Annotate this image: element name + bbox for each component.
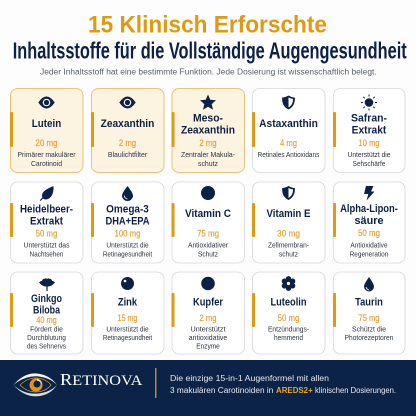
card: Alpha-Liponsäure: Regeneration xyxy=(350,250,388,258)
icon: flower xyxy=(282,276,295,291)
icon: shield xyxy=(282,96,295,110)
card: Vitamin C: 75 mg xyxy=(197,229,219,239)
card: Alpha-Liponsäure: 50 mg xyxy=(358,228,380,238)
card: Omega-3 DHA+EPA: Omega-3 xyxy=(106,204,149,216)
card: Vitamin E: Zellmembran- xyxy=(268,240,310,250)
card: Heidelbeer-Extrakt: Heidelbeer- xyxy=(20,204,73,216)
icon: drop xyxy=(364,277,374,292)
card: Meso-Zeaxanthin: 2 mg xyxy=(199,138,217,148)
card: Luteolin: Luteolin xyxy=(270,297,307,309)
card: Astaxanthin: Retinales Antioxidans xyxy=(258,150,320,159)
logo: wordmark: RETINOVA xyxy=(60,370,142,389)
card: Vitamin C: Schutz xyxy=(198,250,218,258)
card: Safran-Extrakt: Safran- xyxy=(351,113,387,125)
icon: shield xyxy=(282,186,295,200)
logo: eye xyxy=(14,373,57,396)
icon: eye xyxy=(38,96,55,108)
card: Vitamin E: schutz xyxy=(279,250,298,258)
card: Taurin: Taurin xyxy=(355,297,383,309)
card: Omega-3 DHA+EPA: 100 mg xyxy=(114,229,140,239)
card: Heidelbeer-Extrakt: Unterstützt das xyxy=(24,240,70,250)
card: Safran-Extrakt xyxy=(333,88,405,172)
card: Lutein: Carotinoid xyxy=(31,159,62,168)
icon: circle xyxy=(201,277,215,290)
tagline xyxy=(170,373,396,395)
card: Zink: Unterstützt die xyxy=(106,324,149,334)
card: Luteolin: hemmend xyxy=(274,333,303,342)
card: Vitamin C xyxy=(172,182,244,263)
card: Lutein: Lutein xyxy=(32,118,61,130)
icon: sphere xyxy=(121,277,134,290)
tagline: AREDS2+ xyxy=(276,385,313,395)
card: Omega-3 DHA+EPA xyxy=(91,182,164,263)
card: Ginkgo Biloba: des Sehnervs xyxy=(27,342,66,351)
card: Ginkgo Biloba: Ginkgo xyxy=(31,293,62,305)
card: Vitamin E: 30 mg xyxy=(277,229,300,239)
card: Taurin: Schützt die xyxy=(352,324,386,334)
icon: sun xyxy=(361,94,377,110)
card: Lutein: 20 mg xyxy=(36,138,58,148)
card: Safran-Extrakt: Sehschärfe xyxy=(353,159,385,168)
card: Kupfer: antioxidative xyxy=(189,333,227,342)
card: Luteolin: 50 mg xyxy=(278,313,299,323)
card: Omega-3 DHA+EPA: Unterstützt die xyxy=(106,240,149,250)
card: Astaxanthin: 4 mg xyxy=(280,138,297,148)
card: Heidelbeer-Extrakt xyxy=(10,182,83,263)
card: Zink xyxy=(91,272,164,354)
subtitle: Jeder Inhaltsstoff hat eine bestimmte Funktion. Jede Dosierung ist wissenschaftlich belegt. xyxy=(40,68,377,76)
card: Zeaxanthin: Blaulichtfilter xyxy=(108,150,148,159)
card: Lutein: Primärer makulärer xyxy=(18,150,76,159)
card: Omega-3 DHA+EPA: DHA+EPA xyxy=(106,216,150,228)
card: Ginkgo Biloba: Fördert die xyxy=(30,324,63,334)
card: Meso-Zeaxanthin xyxy=(172,88,244,172)
card: Heidelbeer-Extrakt: Extrakt xyxy=(30,216,63,228)
card: Kupfer xyxy=(172,272,244,354)
card: Kupfer: Kupfer xyxy=(193,297,223,309)
card: Zink: Zink xyxy=(118,297,138,309)
card: Zink: 15 mg xyxy=(118,313,137,323)
card: Alpha-Liponsäure xyxy=(333,182,405,263)
icon: ginkgo leaf xyxy=(39,278,55,291)
card: Heidelbeer-Extrakt: Nachtsehen xyxy=(30,250,63,258)
card: Zeaxanthin: Zeaxanthin xyxy=(101,118,154,130)
card: Taurin xyxy=(333,272,405,354)
card: Zeaxanthin: 2 mg xyxy=(119,138,136,148)
card: Ginkgo Biloba: Durchblutung xyxy=(27,333,66,342)
card: Alpha-Liponsäure: Antioxidative xyxy=(350,240,388,250)
tagline: 3 makulären Carotinoiden in xyxy=(170,385,273,395)
card: Heidelbeer-Extrakt: 50 mg xyxy=(36,229,57,239)
card: Vitamin C: Antioxidativer xyxy=(188,240,229,250)
card: Meso-Zeaxanthin: Meso- xyxy=(193,113,223,125)
card: Ginkgo Biloba: Biloba xyxy=(33,304,61,316)
card: Vitamin C: Vitamin C xyxy=(185,208,231,220)
card: Meso-Zeaxanthin: Zentraler Makula- xyxy=(181,150,236,159)
card: Zink: Retinagesundheit xyxy=(103,333,152,342)
card: Vitamin E: Vitamin E xyxy=(266,208,311,220)
tagline: Die einzige 15-in-1 Augenformel mit allen xyxy=(170,373,329,383)
card: Alpha-Liponsäure: Alpha-Lipon- xyxy=(340,203,398,215)
card: Alpha-Liponsäure: säure xyxy=(354,215,384,227)
card: Lutein xyxy=(10,88,83,172)
icon: circle xyxy=(201,186,215,200)
card: Luteolin xyxy=(252,272,325,354)
card: Taurin: 75 mg xyxy=(358,313,380,323)
card: Astaxanthin: Astaxanthin xyxy=(259,118,318,130)
icon: lightning bolt xyxy=(364,186,374,200)
icon: leaf xyxy=(40,186,54,201)
card: Ginkgo Biloba xyxy=(10,272,83,354)
card: Safran-Extrakt: 10 mg xyxy=(358,138,380,148)
card: Kupfer: Enzyme xyxy=(196,342,220,351)
card: Taurin: Photorezeptoren xyxy=(345,333,393,342)
card: Luteolin: Entzündungs- xyxy=(268,324,310,334)
card: Safran-Extrakt: Extrakt xyxy=(352,124,387,136)
icon: star xyxy=(200,94,216,110)
icon: drop xyxy=(122,186,133,201)
card: Astaxanthin xyxy=(252,88,325,172)
divider xyxy=(155,368,156,398)
card: Omega-3 DHA+EPA: Retinagesundheit xyxy=(103,250,152,258)
card: Meso-Zeaxanthin: schutz xyxy=(198,159,218,168)
card: Safran-Extrakt: Unterstützt die xyxy=(348,150,390,159)
card: Kupfer: 2 mg xyxy=(200,313,216,323)
card: Meso-Zeaxanthin: Zeaxanthin xyxy=(181,124,235,136)
card: Vitamin E xyxy=(252,182,325,263)
tagline: klinischen Dosierungen. xyxy=(315,385,396,395)
title: line 1: 15 Klinisch Erforschte xyxy=(88,12,327,38)
card: Kupfer: Unterstützt xyxy=(190,324,226,334)
card: Zeaxanthin xyxy=(91,88,164,172)
footer banner xyxy=(0,360,416,416)
card: Ginkgo Biloba: 40 mg xyxy=(36,315,57,325)
icon: eye xyxy=(119,96,136,108)
